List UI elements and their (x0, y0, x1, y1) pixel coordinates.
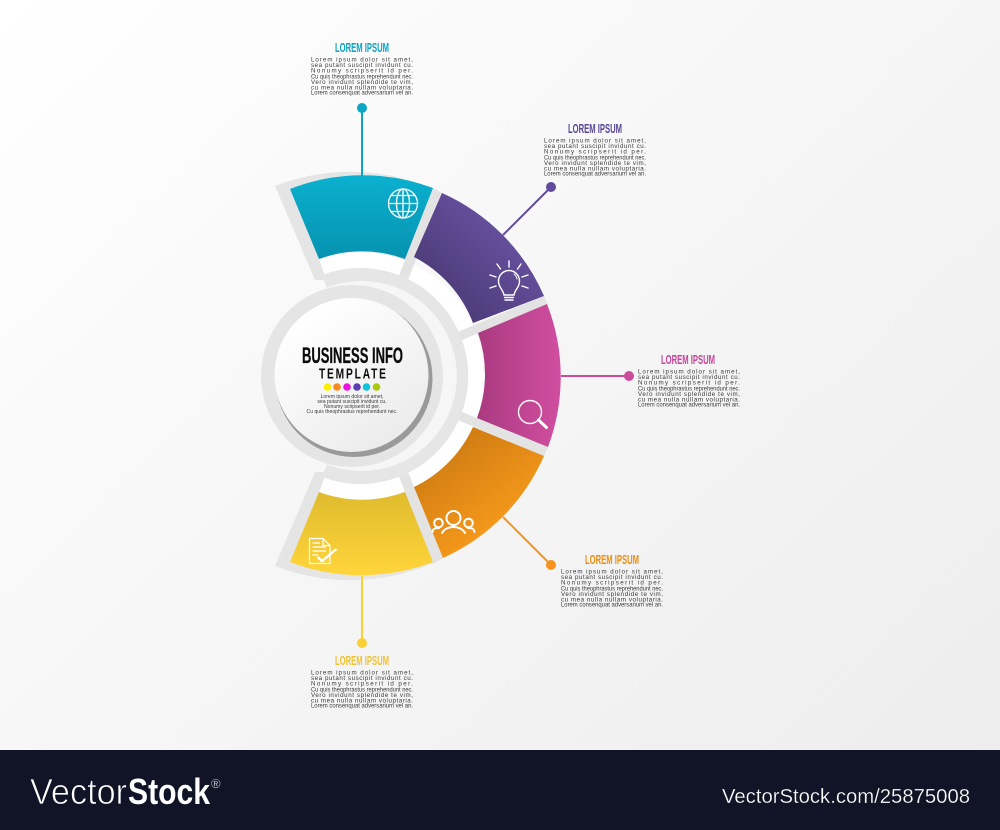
footer bar (0, 750, 1000, 830)
icon: magnifier (518, 400, 546, 428)
callout: teal: Nonumy scripserit id per. (311, 68, 413, 74)
callout: pink: Lorem ipsum dolor sit amet, (638, 368, 740, 376)
callout: purple: sea putant suscipit invidunt cu. (544, 143, 646, 150)
footer logo (30, 771, 221, 812)
center description: Lorem ipsum dolor sit amet, (321, 394, 383, 400)
callout: pink: Cu quis theophrastus reprehendunt nec. (638, 386, 740, 392)
color dots (324, 383, 380, 391)
callout: yellow: Nonumy scripserit id per. (311, 680, 413, 688)
title: BUSINESS INFO (302, 343, 403, 368)
callout: teal: Cu quis theophrastus reprehendunt nec. (311, 74, 413, 80)
connector: pink (561, 371, 634, 381)
callout: orange: sea putant suscipit invidunt cu. (561, 574, 663, 581)
connector: yellow (357, 576, 367, 648)
callout: pink (638, 353, 740, 408)
callout: teal: cu mea nulla nullam voluptaria. (311, 84, 413, 92)
segment: teal (290, 175, 433, 259)
callout: yellow: sea putant suscipit invidunt cu. (311, 675, 413, 682)
connector: teal (357, 103, 367, 176)
callout: teal: Vero invidunt splendide te vim, (311, 79, 413, 86)
callout: yellow: LOREM IPSUM (335, 654, 389, 668)
callout: purple (544, 122, 646, 178)
center description: Nonumy scripserit id per. (324, 404, 380, 410)
center description: Cu quis theophrastus reprehendunt nec. (307, 409, 397, 415)
callout: purple: LOREM IPSUM (568, 122, 622, 136)
callout: orange: Vero invidunt splendide te vim, (561, 591, 663, 598)
segment: orange (414, 427, 544, 558)
footer logo: Stock (128, 771, 211, 812)
callout: orange: LOREM IPSUM (585, 553, 639, 567)
callout: purple: Vero invidunt splendide te vim, (544, 160, 646, 167)
connector: orange (503, 517, 556, 570)
callout: teal: LOREM IPSUM (335, 41, 389, 55)
callout: purple: Lorem ipsum dolor sit amet, (544, 138, 646, 144)
connector: purple (503, 182, 556, 235)
callout: pink: cu mea nulla nullam voluptaria. (638, 396, 740, 404)
callout: teal: Lorem consenquat adversarium vel an. (311, 90, 413, 96)
icon: document with check (310, 538, 336, 564)
callout: yellow: Cu quis theophrastus reprehendunt nec. (311, 686, 413, 694)
center description: sea putant suscipit invidunt cu. (317, 399, 387, 405)
center description (307, 394, 397, 415)
footer url: VectorStock.com/25875008 (722, 785, 970, 808)
footer logo: Vector (30, 771, 127, 812)
icon: people (432, 511, 474, 533)
segment: pink (477, 304, 561, 447)
icon: globe (388, 189, 418, 218)
callout: purple: Nonumy scripserit id per. (544, 148, 646, 156)
callout: pink: Nonumy scripserit id per. (638, 380, 740, 386)
callout: orange: Cu quis theophrastus reprehendunt nec. (561, 586, 663, 592)
footer logo: ® (211, 776, 221, 791)
callout: teal: Lorem ipsum dolor sit amet, (311, 56, 413, 64)
callout: orange: cu mea nulla nullam voluptaria. (561, 596, 663, 604)
callout: teal: sea putant suscipit invidunt cu. (311, 62, 413, 69)
callout: purple: Lorem consenquat adversarium vel an. (544, 170, 646, 178)
subtitle: TEMPLATE (319, 364, 386, 382)
segment: purple (414, 193, 544, 323)
hub rings (261, 268, 468, 484)
callout: pink: sea putant suscipit invidunt cu. (638, 374, 740, 381)
callout: orange: Lorem ipsum dolor sit amet, (561, 568, 663, 576)
callout: yellow: Vero invidunt splendide te vim, (311, 692, 413, 699)
callout: teal (311, 41, 413, 96)
callout: purple: cu mea nulla nullam voluptaria. (544, 166, 646, 172)
callout: yellow: cu mea nulla nullam voluptaria. (311, 698, 413, 704)
callout: purple: Cu quis theophrastus reprehendunt nec. (544, 154, 646, 162)
segment backing plates (275, 172, 548, 580)
callout: orange: Lorem consenquat adversarium vel an. (561, 602, 663, 608)
icon: light bulb (490, 261, 528, 300)
callout: yellow (311, 654, 413, 710)
callout: pink: Lorem consenquat adversarium vel an. (638, 402, 740, 408)
callout: pink: Vero invidunt splendide te vim, (638, 391, 740, 398)
callout: orange: Nonumy scripserit id per. (561, 580, 663, 586)
callout: yellow: Lorem ipsum dolor sit amet, (311, 670, 413, 676)
callout: pink: LOREM IPSUM (661, 353, 715, 367)
callout: orange (561, 553, 663, 608)
callout: yellow: Lorem consenquat adversarium vel an. (311, 702, 413, 710)
segment: yellow (290, 492, 433, 575)
